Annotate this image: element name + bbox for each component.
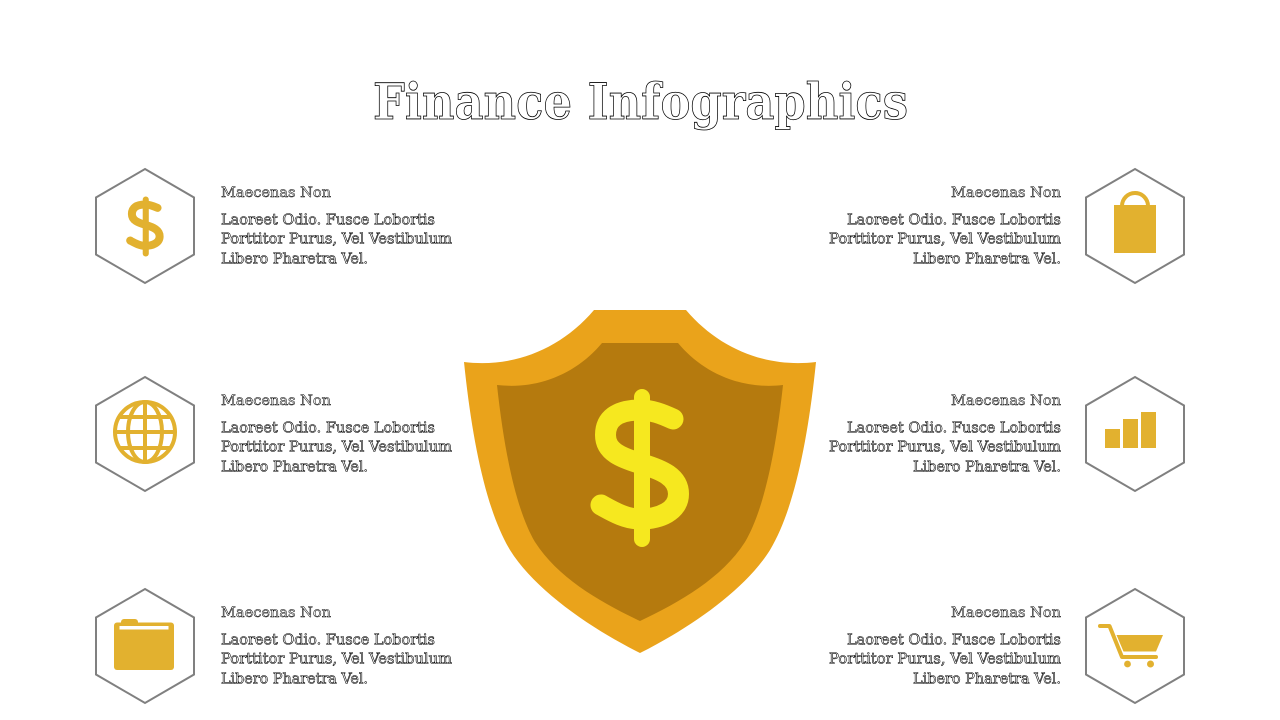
heading: Maecenas Non xyxy=(951,393,1061,409)
icon: globe xyxy=(115,402,175,462)
hexagon xyxy=(1086,169,1184,283)
body text: Laoreet Odio. Fusce Lobortis xyxy=(221,210,435,228)
hexagon xyxy=(1086,377,1184,491)
panel: top right xyxy=(829,169,1184,283)
heading: Maecenas Non xyxy=(951,605,1061,621)
hexagon xyxy=(1086,589,1184,703)
icon: shopping cart xyxy=(1100,626,1163,668)
body text: Libero Pharetra Vel. xyxy=(221,250,368,268)
body text: Porttitor Purus, Vel Vestibulum xyxy=(221,650,452,668)
body text: Libero Pharetra Vel. xyxy=(913,250,1061,268)
panel: top left xyxy=(96,169,452,283)
body text xyxy=(829,210,1061,268)
body text: Laoreet Odio. Fusce Lobortis xyxy=(221,630,435,648)
body text xyxy=(829,630,1061,688)
hexagon xyxy=(96,169,194,283)
body text: Porttitor Purus, Vel Vestibulum xyxy=(829,230,1061,248)
icon: bar chart xyxy=(1105,412,1156,448)
body text: Libero Pharetra Vel. xyxy=(221,458,368,476)
title: Finance Infographics xyxy=(373,72,908,131)
body text: Porttitor Purus, Vel Vestibulum xyxy=(829,650,1061,668)
hexagon xyxy=(96,377,194,491)
body text: Laoreet Odio. Fusce Lobortis xyxy=(847,418,1061,436)
shield dollar sign xyxy=(601,397,678,539)
panel: middle left xyxy=(96,377,452,491)
body text: Laoreet Odio. Fusce Lobortis xyxy=(847,210,1061,228)
panel: bottom right xyxy=(829,589,1184,703)
heading: Maecenas Non xyxy=(221,605,331,621)
body text: Laoreet Odio. Fusce Lobortis xyxy=(847,630,1061,648)
body text xyxy=(829,418,1061,476)
body text: Libero Pharetra Vel. xyxy=(913,670,1061,688)
body text: Libero Pharetra Vel. xyxy=(221,670,368,688)
body text: Laoreet Odio. Fusce Lobortis xyxy=(221,418,435,436)
body text: Porttitor Purus, Vel Vestibulum xyxy=(221,438,452,456)
shield inner xyxy=(497,343,783,621)
body text: Libero Pharetra Vel. xyxy=(913,458,1061,476)
body text: Porttitor Purus, Vel Vestibulum xyxy=(221,230,452,248)
heading: Maecenas Non xyxy=(221,185,331,201)
panel: bottom left xyxy=(96,589,452,703)
heading: Maecenas Non xyxy=(951,185,1061,201)
body text xyxy=(221,210,452,268)
central shield xyxy=(464,310,816,653)
heading: Maecenas Non xyxy=(221,393,331,409)
body text: Porttitor Purus, Vel Vestibulum xyxy=(829,438,1061,456)
icon: shopping bag xyxy=(1114,193,1156,253)
shield outer xyxy=(464,310,816,653)
panel: middle right xyxy=(829,377,1184,491)
icon: folder xyxy=(114,619,174,670)
body text xyxy=(221,630,452,688)
body text xyxy=(221,418,452,476)
hexagon xyxy=(96,589,194,703)
icon: dollar xyxy=(130,200,160,253)
